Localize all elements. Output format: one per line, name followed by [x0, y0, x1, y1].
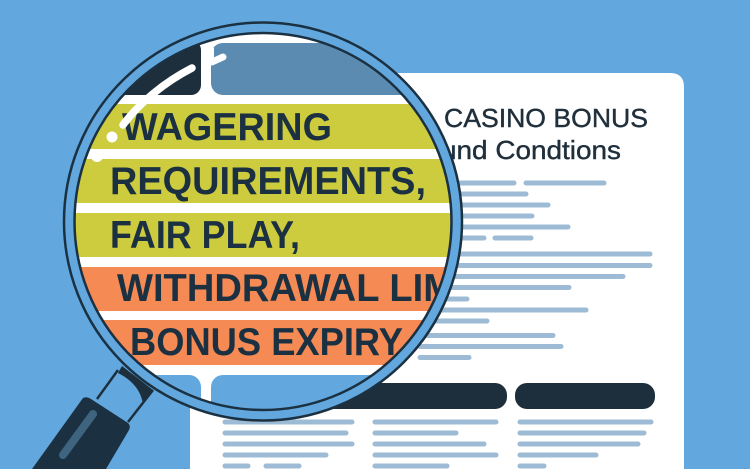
- document text lines: [420, 183, 650, 358]
- document heading: CASINO BONUS: [444, 103, 648, 133]
- handle collar: [118, 366, 153, 404]
- handle neck: [97, 370, 153, 422]
- highlight band: bonus expiry: [104, 320, 422, 365]
- magnified blocks: top: [125, 45, 201, 95]
- magnified terms text: FAIR PLAY,: [110, 214, 300, 257]
- column text lines: [225, 422, 651, 466]
- magnified terms text: [112, 113, 438, 356]
- document heading: und Condtions: [441, 135, 621, 165]
- highlight band: wagering: [90, 104, 436, 149]
- grip highlight: [63, 414, 93, 455]
- panel: terms document: [190, 73, 684, 469]
- lens glare: [91, 45, 223, 162]
- magnified terms text: WAGERING: [122, 106, 332, 149]
- lens rim: [64, 22, 462, 420]
- magnified terms text: REQUIREMENTS,: [110, 160, 426, 203]
- highlight band: withdrawal limits: [81, 267, 444, 311]
- highlight band: requirements: [60, 159, 470, 203]
- magnified blocks: bottom: [156, 375, 201, 398]
- magnified terms text: BONUS EXPIRY: [130, 321, 403, 364]
- magnified terms text: WITHDRAWAL LIM: [117, 267, 455, 310]
- document heading: [441, 103, 648, 165]
- icon: magnifier handle: [32, 366, 153, 469]
- highlight band: fair play: [60, 213, 470, 257]
- column header bars: [300, 383, 655, 409]
- magnified lens: [60, 22, 471, 435]
- handle grip: [32, 397, 130, 469]
